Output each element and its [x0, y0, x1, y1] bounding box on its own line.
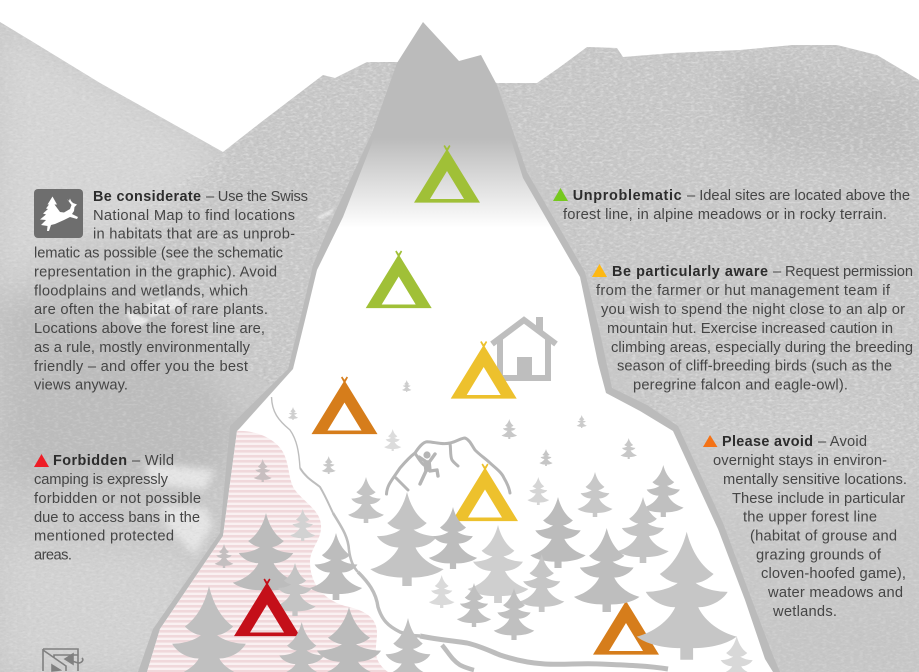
text block: be particularly aware: peregrine falcon and eagle-owl). [633, 377, 848, 393]
text block: be considerate: are often the habitat of rare plants. [34, 302, 268, 318]
text block: be considerate: National Map to find locations [93, 208, 295, 224]
text block: forbidden: camping is expressly [34, 472, 169, 488]
text block: be particularly aware: season of cliff-breeding birds (such as the [617, 358, 892, 374]
text block: forbidden [34, 453, 201, 564]
tent: unproblematic, alpine meadow [366, 250, 432, 308]
tent: be aware, by cliff [452, 464, 518, 521]
text block: please avoid: water meadows and [767, 585, 903, 601]
tent: be aware, by hut [451, 341, 517, 399]
text block: be considerate: in habitats that are as unprob- [93, 227, 295, 243]
text block: forbidden: due to access bans in the [34, 510, 200, 526]
text block: be considerate: views anyway. [34, 378, 128, 394]
text block: unproblematic: Unproblematic [573, 188, 682, 204]
text block: please avoid: Please avoid [722, 434, 813, 450]
text block: be considerate: friendly – and offer you the best [34, 359, 248, 375]
text block: please avoid: wetlands. [772, 604, 837, 620]
text block: please avoid: (habitat of grouse and [750, 528, 897, 544]
text block: forbidden: mentioned protected [34, 529, 174, 545]
text block: forbidden: – Wild [132, 453, 174, 469]
text block: please avoid [703, 434, 907, 620]
text block: be considerate: lematic as possible (see the schematic [34, 246, 283, 262]
text block: be considerate [34, 189, 308, 394]
text block: be considerate: Be considerate [93, 189, 201, 205]
text block: be particularly aware: mountain hut. Exercise increased caution in [607, 321, 893, 337]
icon: folded map [43, 649, 83, 671]
mountain outline band [138, 22, 780, 672]
rock outline with climber [386, 438, 510, 494]
text block: be considerate: floodplains and wetlands, which [34, 283, 248, 299]
trees: background forest [215, 380, 684, 616]
text block: be particularly aware: Be particularly aware [612, 264, 768, 280]
text block: please avoid: cloven-hoofed game), [761, 566, 906, 582]
text block: be considerate: Locations above the forest line are, [34, 321, 265, 337]
text block: be particularly aware: – Request permission [773, 264, 913, 280]
text block: be particularly aware: you wish to spend the night close to an alp or [601, 302, 905, 318]
text block: unproblematic: forest line, in alpine meadows or in rocky terrain. [563, 207, 887, 223]
text block: be particularly aware: from the farmer or hut management team if [596, 283, 891, 299]
text block: forbidden: Forbidden [53, 453, 127, 469]
text block: please avoid: mentally sensitive locations. [723, 472, 907, 488]
text block: please avoid: overnight stays in environ- [713, 453, 887, 469]
river path [272, 397, 668, 670]
text block: be particularly aware [592, 264, 913, 393]
tent: please avoid, upper forest line [312, 376, 378, 434]
text block: be considerate: – Use the Swiss [206, 189, 308, 205]
text block: forbidden: forbidden or not possible [34, 491, 201, 507]
hatched protected area [147, 431, 388, 672]
mountain interior with snow gradient [147, 95, 773, 672]
icon: tree and deer badge [34, 189, 83, 238]
tent: unproblematic, above forest line [414, 145, 480, 203]
trees: foreground forest [172, 497, 753, 672]
text block: be considerate: as a rule, mostly environmentally [34, 340, 251, 356]
text block: unproblematic: – Ideal sites are located above the [687, 188, 910, 204]
text block: be particularly aware: climbing areas, especially during the breeding [611, 340, 913, 356]
text block: please avoid: grazing grounds of [756, 547, 882, 563]
text block: unproblematic [553, 188, 910, 223]
text block: forbidden: areas. [34, 548, 72, 564]
tent: forbidden [234, 578, 300, 636]
icon: mountain hut [492, 317, 556, 378]
text block: please avoid: – Avoid [818, 434, 867, 450]
icon: climber [419, 451, 438, 484]
text block: please avoid: the upper forest line [743, 510, 877, 526]
text block: be considerate: representation in the graphic). Avoid [34, 264, 277, 280]
tent: please avoid, wetland [593, 597, 659, 655]
text block: please avoid: These include in particular [732, 491, 905, 507]
